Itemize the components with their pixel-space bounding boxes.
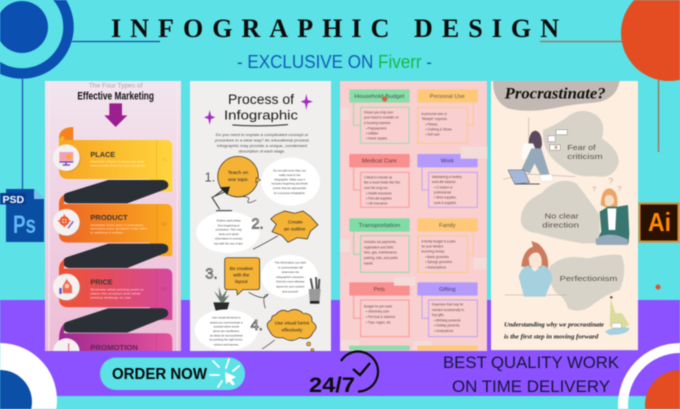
card: medical care: Medical Care — [362, 159, 397, 165]
hand-drawn heading — [224, 91, 298, 122]
figure: confused woman — [592, 177, 629, 245]
icon: cursor click — [210, 359, 239, 387]
heading: Procrastinate? — [505, 86, 606, 103]
ribbon: place: Illustrate where to promote and — [90, 160, 144, 164]
yellow box: be creative with the layout — [225, 258, 260, 295]
figure: confused woman: ? — [592, 185, 596, 194]
card: gifting — [417, 282, 478, 337]
card: transportation: parking, tolls, and public — [364, 256, 398, 260]
white bubble: step 3 text — [261, 255, 318, 298]
quality statement: BEST QUALITY WORK — [443, 353, 620, 372]
ribbon: price: Illustrate what pricing point to — [90, 288, 144, 292]
white bubble: step 2 text: from beginning to — [218, 223, 240, 227]
ribbon: price: pricing strategy to use — [90, 295, 132, 299]
24/7 clock badge: 24/7 — [309, 374, 355, 397]
card: transportation: Transportation — [358, 223, 400, 229]
icon: monitor — [53, 144, 81, 172]
figure: meditating person with laptop — [605, 296, 630, 335]
card: gifting: Expenses that may be — [432, 303, 463, 307]
card: personal use: • Clothing & Shoes — [425, 127, 452, 131]
card: medical care: • Health insurance — [366, 191, 392, 195]
card: medical care: • Life insurance — [366, 202, 388, 206]
card: household budget: • Home repairs — [366, 137, 387, 141]
card: pets — [349, 282, 410, 337]
ribbon: place: 01 — [162, 157, 168, 163]
block: perfectionism — [505, 241, 624, 311]
card: medical care: Critical to include as — [364, 175, 393, 179]
orange marker dot — [382, 96, 387, 102]
figure: woman with chin on hands — [505, 241, 568, 297]
yellow cloud: use visual forms effectively: effectively — [282, 327, 303, 332]
dot pattern — [340, 239, 487, 351]
white bubble: step 3 text: The information you wish — [275, 260, 306, 264]
order now button — [100, 358, 245, 390]
title: INFOGRAPHIC DESIGN — [111, 14, 559, 43]
closing statement: Understanding why we procrastinate — [504, 321, 604, 328]
hand-drawn heading: Infographic — [224, 107, 298, 122]
background: purple band — [0, 300, 680, 396]
yellow cloud: use visual forms effectively — [267, 310, 316, 351]
block: fear of criticism: Fear of — [567, 145, 596, 152]
card: household budget — [349, 89, 410, 143]
card: gifting: • Graduations — [434, 329, 454, 333]
subtitle: - EXCLUSIVE ON Fiverr - — [237, 52, 432, 72]
card: transportation: fees, gas, maintenance, — [364, 251, 398, 255]
ribbon: price: 03 — [161, 287, 167, 293]
card: work: professional — [434, 190, 451, 194]
block: no clear direction — [521, 177, 629, 245]
icon: gear and wrench — [53, 209, 81, 237]
step 2 number: 2. — [251, 216, 264, 232]
step 4 number: 4. — [251, 318, 263, 334]
white bubble: step 4 text: concept when words — [213, 325, 240, 329]
yellow cloud: use visual forms effectively: Use visual forms — [275, 320, 310, 325]
dark band 1 — [63, 180, 168, 203]
card: transportation: transit. — [364, 261, 374, 265]
card: medical care: like a must! Aside like this — [364, 181, 400, 185]
card: work — [417, 154, 478, 207]
ribbon: promotion — [59, 324, 172, 352]
decorative orange circle, top right — [540, 0, 680, 152]
block: no clear direction: No clear — [545, 214, 580, 221]
white bubble: step 2 text: use with the use of tips. — [214, 241, 244, 245]
orange marker dot — [656, 284, 660, 290]
panel: effective marketing — [45, 81, 181, 365]
card: family: • Splurge groceries — [425, 260, 452, 264]
white bubble: step 1 text: includes beginning and finish — [271, 182, 308, 186]
card: household budget: • Pay/payment — [366, 126, 387, 130]
card: household budget: a housing expense — [364, 121, 391, 125]
card: family: incoming money — [421, 249, 445, 253]
card: gifting: • Holiday presents — [434, 324, 460, 328]
card: transportation: Includes car payments, — [364, 240, 397, 244]
decorative blue target circle, top left — [0, 0, 160, 190]
white bubble: step 2 text: Outline each phase — [216, 219, 241, 223]
card: work: Work — [441, 159, 454, 165]
card: personal use: "lifestyle" expense. — [421, 117, 448, 121]
card: transportation: registration and DMV — [364, 245, 395, 249]
card: household budget: Household Budget — [354, 94, 405, 100]
white bubble: step 4 text: as ideas be accomplished — [210, 333, 243, 337]
icon: purple sparkles — [204, 94, 313, 125]
white bubble: step 4 text: alone are insufficient, — [213, 329, 240, 333]
card: gifting: buy gifts — [432, 313, 444, 317]
card: gifting: • Birthday presents — [434, 319, 461, 323]
intro paragraph: Do you need to explain a complicated concept or — [216, 133, 309, 137]
ribbon: place: PLACE — [90, 150, 115, 159]
card: family: for your family's — [421, 244, 444, 248]
card: family: A family budget is a plan — [421, 239, 456, 243]
quality statement: ON TIME DELIVERY — [452, 377, 610, 396]
white bubble: step 1 text — [261, 158, 320, 206]
arrow — [104, 103, 127, 127]
card: household budget: your head to consider on — [364, 116, 399, 120]
white bubble: step 3 text: and yourself. — [282, 289, 299, 293]
ribbon: place — [59, 140, 172, 192]
yellow burst: create an outline: Create — [288, 220, 303, 226]
card: personal use: • Self care — [425, 133, 440, 137]
icon: Photoshop PSD file — [0, 189, 44, 242]
yellow burst: create an outline: an outline — [284, 227, 306, 233]
white bubble: step 1 text: Do not add more than you — [273, 169, 306, 173]
icon: Adobe Illustrator — [640, 204, 678, 242]
block: fear of criticism: criticism — [567, 154, 603, 161]
icon: Photoshop PSD file: Ps — [13, 211, 36, 239]
decorative white ring and orange circle, bottom right — [618, 343, 680, 409]
card: work: tools & supplies — [434, 201, 457, 205]
card: family: • Basic groceries — [425, 255, 449, 259]
icon: promotion — [52, 338, 80, 352]
yellow box: be creative with the layout: Be creative — [230, 266, 253, 271]
icon: desk lamp — [212, 187, 232, 211]
quality statement — [443, 353, 620, 396]
lower section — [195, 211, 321, 351]
closing statement: is the first step in moving forward — [504, 334, 599, 341]
white bubble: step 1 text: points that are appropriate — [273, 186, 307, 190]
white bubble: step 2 text — [196, 212, 260, 253]
card: personal use — [417, 89, 478, 143]
24/7 clock badge — [309, 352, 378, 397]
ribbon: place: how people shop for your products — [90, 164, 146, 168]
icon: Adobe Illustrator: Ai — [648, 207, 671, 237]
white bubble: step 4 text: Use visual elements to — [212, 315, 241, 319]
intro paragraph: infographic may provide a unique, condensed — [217, 144, 307, 148]
ribbon: price: PRICE — [90, 278, 113, 287]
white bubble: step 2 text: conclusion. This may — [215, 228, 242, 232]
card: pets: Budget for pet costs — [364, 304, 392, 308]
white bubble: step 4 text: colours and layouts. — [214, 343, 239, 347]
white bubble: step 3 text: determine the — [282, 270, 299, 274]
ribbon: promotion: PROMOTION — [90, 343, 138, 352]
figure: confused woman: ? — [609, 177, 614, 186]
ribbon: product: to address it solves — [90, 230, 124, 234]
yellow box: be creative with the layout: layout — [235, 279, 248, 284]
white bubble: step 4 text: by pointing the right forms, — [210, 338, 243, 342]
white bubble: step 2 text: information in concise — [215, 236, 243, 240]
card: personal use: A personal care or — [421, 112, 447, 116]
panel heading — [77, 83, 154, 102]
step 1 number: 1. — [205, 171, 215, 185]
card: household budget: • Utilities — [366, 131, 379, 135]
icon: price tag — [53, 274, 81, 302]
white bubble: step 1 text: infographic. Make sure it — [274, 177, 305, 181]
card: household budget: Dream you truly over — [364, 110, 393, 114]
white bubble: step 4 text — [195, 309, 258, 351]
panel heading: The Four Types of — [89, 83, 143, 90]
dark band 3 — [63, 308, 168, 333]
ribbon: product: services your product may offer — [90, 227, 148, 231]
white bubble: step 2 text: keep your great — [219, 232, 239, 236]
card: family — [417, 218, 478, 272]
upper categories — [341, 89, 487, 207]
card: medical care — [349, 154, 410, 207]
card: gifting: Gifting — [439, 287, 456, 293]
ribbon: product: PRODUCT — [90, 213, 128, 222]
yellow bubble: teach on one topic: Teach on — [228, 170, 248, 176]
white bubble: step 3 text: Find the most effective — [276, 280, 305, 284]
dot pattern — [341, 108, 487, 159]
card: medical care: over the long run — [364, 186, 388, 190]
yellow bubble: teach on one topic: one topic — [228, 177, 249, 183]
panel heading: Effective Marketing — [77, 90, 154, 102]
card: gifting: needed occasionally to — [432, 308, 464, 312]
intro paragraph — [215, 133, 309, 153]
white bubble: step 3 text: to communicate will — [278, 265, 303, 269]
white bubble: step 3 text: infographic's structure. — [276, 275, 305, 279]
yellow box: be creative with the layout: with the — [233, 273, 250, 278]
card: work: Maintaining a healthy — [432, 175, 462, 179]
panel: budget categories — [340, 81, 487, 351]
ribbon: product: Illustrate how your 4 premium — [90, 223, 144, 227]
hand-drawn heading: Process of — [228, 91, 294, 107]
yellow bubble: teach on one topic — [218, 156, 261, 197]
step 3 number: 3. — [205, 266, 218, 282]
card: pets: Pets — [374, 287, 385, 293]
yellow burst: create an outline — [271, 211, 318, 242]
card: work: work-life balance — [432, 180, 456, 184]
card: work: • Work supplies, — [434, 196, 457, 200]
lower categories — [340, 218, 487, 351]
panel: process of infographic — [190, 81, 331, 351]
ribbon curl — [58, 126, 74, 141]
next row header stubs — [349, 346, 478, 350]
icon: pencil cup — [309, 277, 321, 304]
intro paragraph: procedure in a clear way? An educational process — [215, 139, 309, 143]
white bubble: step 1 text: really need in the — [279, 173, 301, 177]
card: pets: • Pet food & vitamins — [366, 315, 396, 319]
icon: Photoshop PSD file: PSD — [2, 194, 25, 206]
closing statement — [504, 321, 604, 341]
ribbon: product — [59, 195, 172, 256]
intro paragraph: description of each stage. — [239, 149, 285, 153]
heading blob — [493, 81, 620, 111]
dark band 2 — [63, 244, 168, 268]
card: family: • Subscriptions — [425, 265, 447, 269]
card: personal use: • Fitness — [425, 122, 438, 126]
icon: potted plant — [213, 287, 229, 312]
block: no clear direction: direction — [542, 222, 579, 229]
white bubble: step 3 text: layout for your content — [276, 284, 305, 288]
card: pets: • Veterinary care — [366, 310, 389, 314]
order now button: ORDER NOW — [112, 366, 208, 383]
card: work: • Ci shawn or — [434, 185, 453, 189]
white bubble: step 1 text: for a process infographic. — [274, 191, 306, 195]
upper section — [204, 91, 320, 211]
ribbon: product: 02 — [161, 222, 167, 228]
decorative white and blue circle, bottom left — [0, 343, 57, 409]
block: fear of criticism — [503, 111, 619, 184]
card: personal use: Personal Use — [430, 94, 465, 100]
card: medical care: • First aid supplies — [366, 196, 392, 200]
panel: procrastinate — [491, 81, 638, 350]
figure: confused woman: ? — [617, 184, 621, 193]
block: perfectionism: Perfectionism — [560, 276, 618, 283]
white bubble: step 4 text: assist you communicate a — [210, 320, 243, 324]
ribbon: price — [59, 259, 172, 320]
card: pets: • Toys, cages, etc — [366, 320, 391, 324]
card: transportation — [349, 218, 410, 272]
figure: woman with head in hands — [503, 117, 575, 184]
card: family: Family — [439, 223, 456, 229]
ribbon: price: place the product and what — [90, 291, 141, 295]
